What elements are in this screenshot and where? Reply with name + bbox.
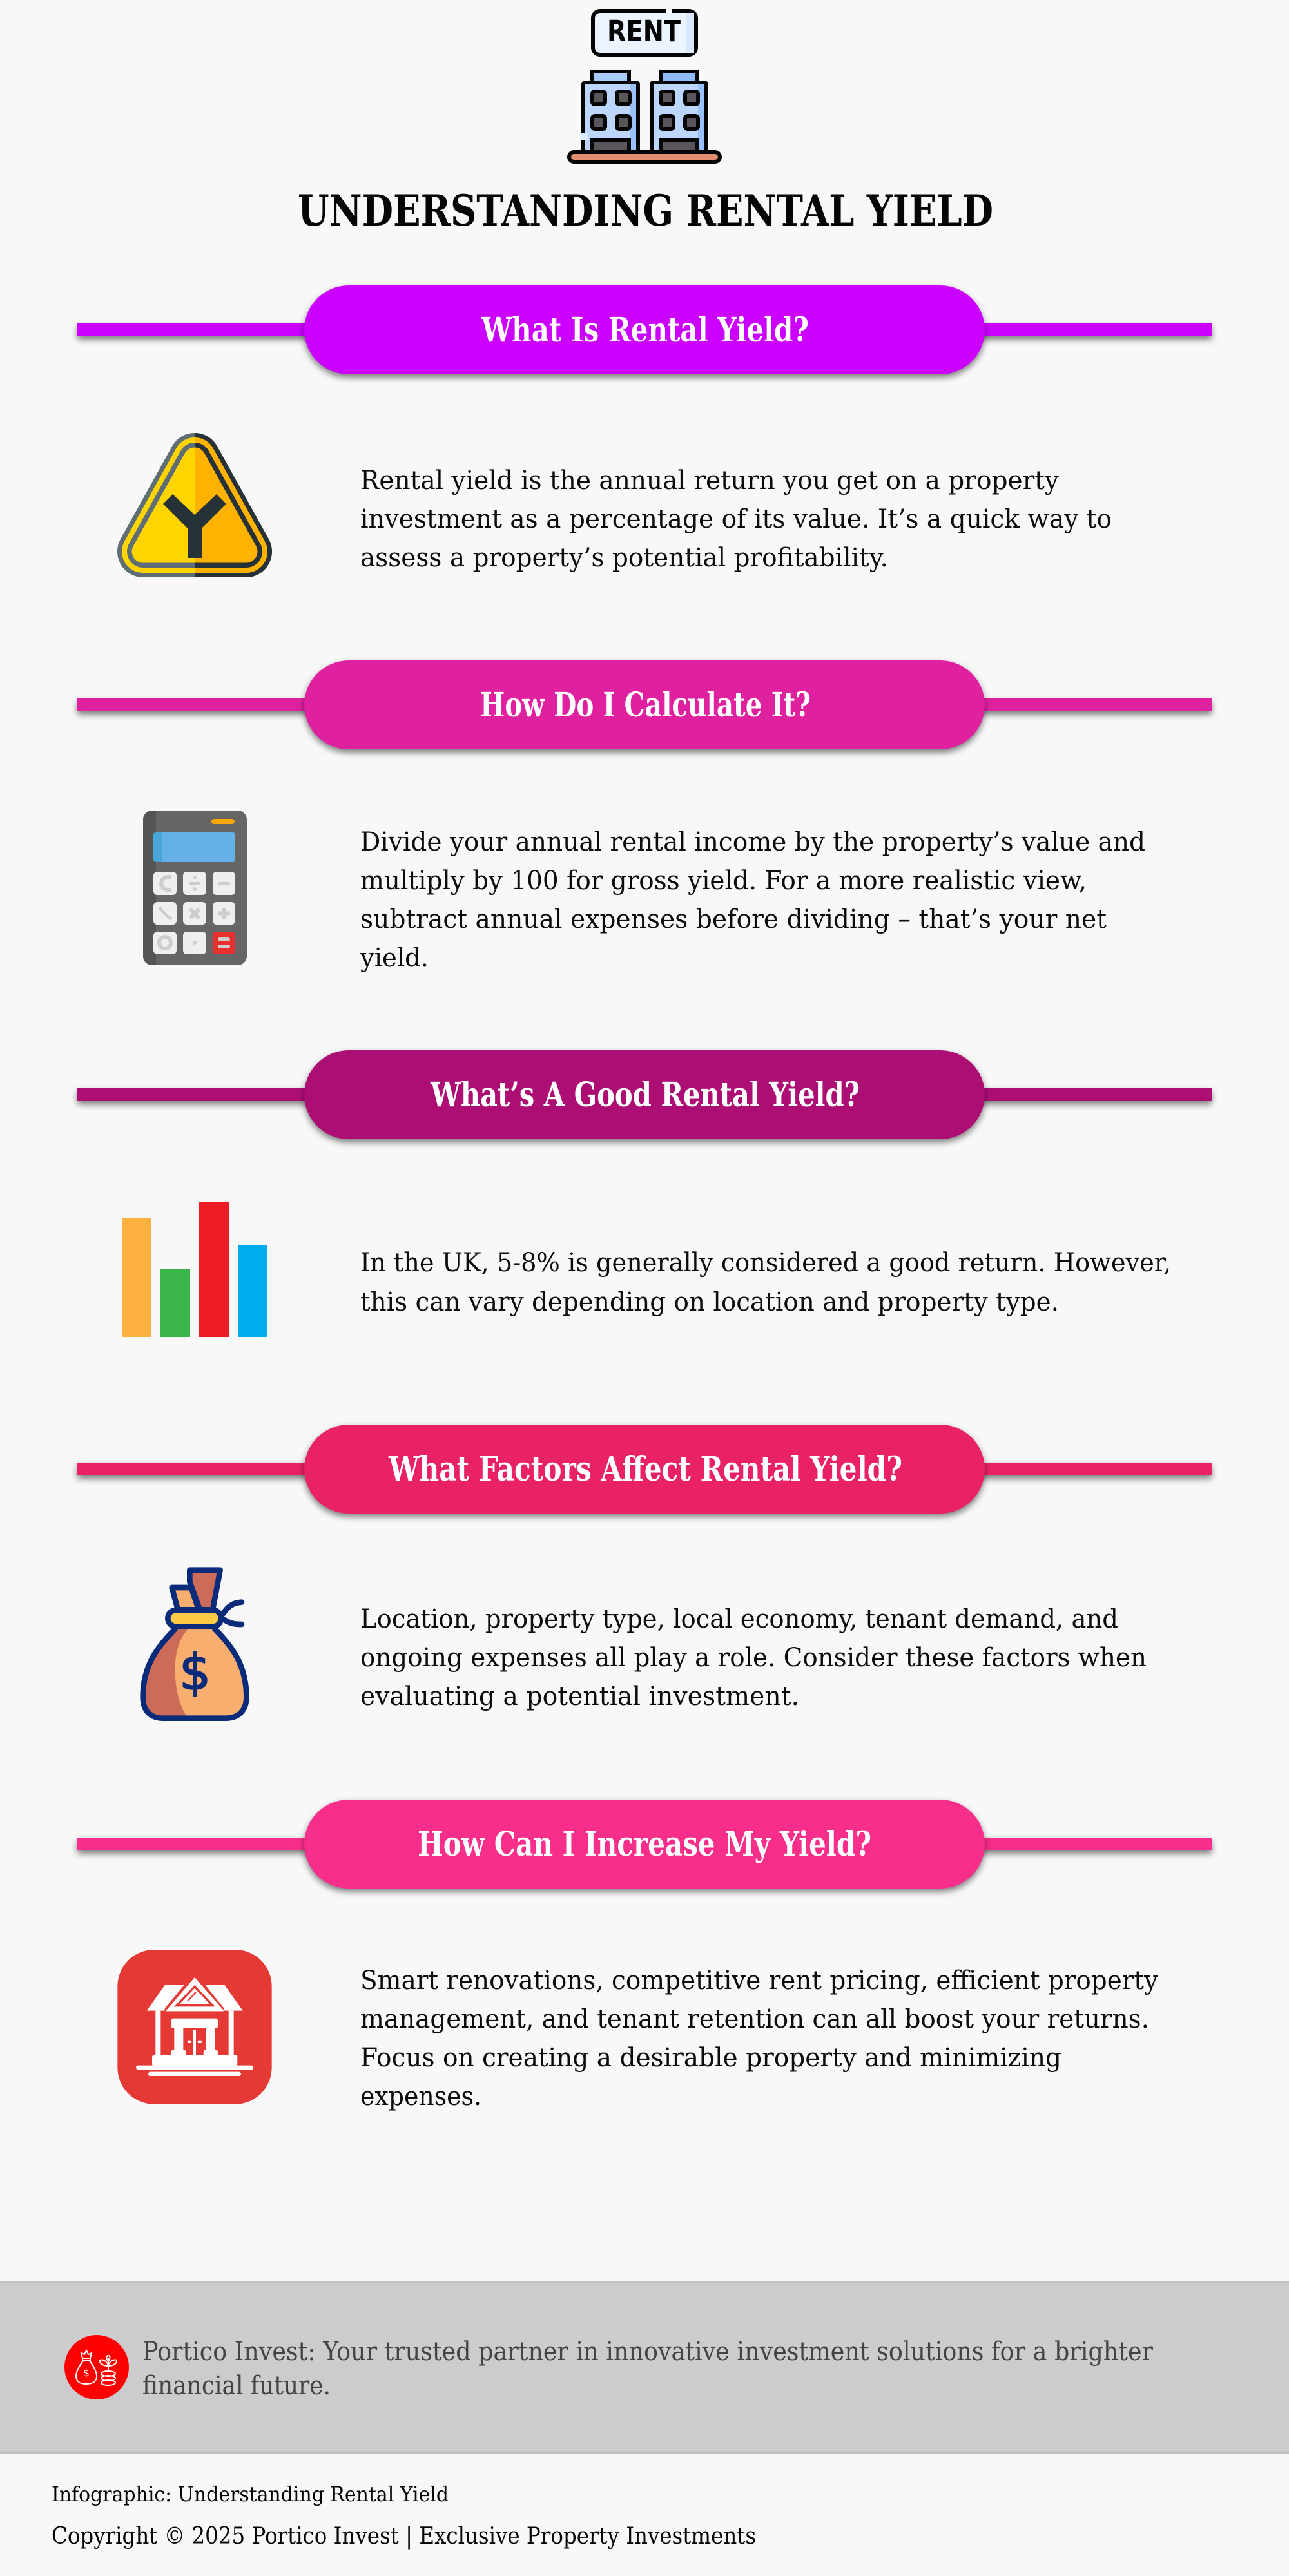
icon: yield road sign <box>143 459 246 558</box>
heading bar: How Can I Increase My Yield?: How Can I Increase My Yield? <box>418 1825 871 1864</box>
text: how can I increase my yield: expenses. <box>360 2082 481 2111</box>
text: what factors affect rental yield <box>360 1604 1147 1711</box>
icon: calculator <box>143 811 247 965</box>
text: what's a good rental yield: In the UK, 5-8% is generally considered a good return. However, <box>360 1248 1171 1278</box>
icon: money bag and plant logo: $ <box>83 2367 90 2379</box>
heading bar: What Factors Affect Rental Yield?: What Factors Affect Rental Yield? <box>388 1450 902 1489</box>
heading bar: What Is Rental Yield? <box>77 285 1212 374</box>
text: how do I calculate it: subtract annual expenses before dividing – that’s your net <box>360 905 1107 934</box>
icon: red property tile <box>117 1950 272 2104</box>
title: UNDERSTANDING RENTAL YIELD <box>298 186 993 236</box>
text: what is rental yield: Rental yield is the annual return you get on a property <box>360 466 1059 495</box>
text: what is rental yield: assess a property’s potential profitability. <box>360 543 888 573</box>
text: what factors affect rental yield: Location, property type, local economy, tenant demand, and <box>360 1604 1118 1634</box>
icon: bar chart <box>122 1202 267 1337</box>
section: what is rental yield <box>77 285 1212 573</box>
heading bar: What's A Good Rental Yield? <box>77 1050 1212 1139</box>
footer: copyright: Copyright © 2025 Portico Invest | Exclusive Property Investments <box>52 2523 756 2550</box>
section: what factors affect rental yield <box>77 1425 1212 1718</box>
section: how do I calculate it <box>77 660 1212 973</box>
text: what factors affect rental yield: ongoing expenses all play a role. Consider these factors when <box>360 1643 1147 1673</box>
icon: rent sign and buildings: RENT <box>607 14 681 48</box>
icon: money bag and plant logo <box>64 2335 129 2399</box>
text: company tagline <box>142 2337 1154 2401</box>
icon: money bag <box>143 1570 246 1718</box>
text: what's a good rental yield: this can vary depending on location and property type. <box>360 1287 1059 1317</box>
heading bar: What's A Good Rental Yield?: What’s A Good Rental Yield? <box>430 1075 860 1115</box>
text: how can I increase my yield: Smart renovations, competitive rent pricing, efficient property <box>360 1966 1158 1995</box>
text: how can I increase my yield: Focus on creating a desirable property and minimizing <box>360 2043 1061 2073</box>
heading bar: What Factors Affect Rental Yield? <box>77 1425 1212 1514</box>
heading bar: How Can I Increase My Yield? <box>77 1800 1212 1889</box>
text: how do I calculate it: Divide your annual rental income by the property’s value and <box>360 827 1145 857</box>
section: what's a good rental yield <box>77 1050 1212 1337</box>
text: how do I calculate it: multiply by 100 for gross yield. For a more realistic view, <box>360 866 1087 896</box>
text: company tagline: financial future. <box>142 2371 331 2401</box>
icon: rent sign and buildings <box>569 8 720 162</box>
icon: money bag: $ <box>179 1644 211 1702</box>
text: how can I increase my yield <box>360 1966 1158 2111</box>
text: how do I calculate it <box>360 827 1145 973</box>
text: what is rental yield: investment as a percentage of its value. It’s a quick way to <box>360 505 1112 534</box>
footer: infographic title: Infographic: Understanding Rental Yield <box>52 2482 449 2506</box>
section: how can I increase my yield <box>77 1800 1212 2111</box>
heading bar: How Do I Calculate It?: How Do I Calculate It? <box>480 686 811 725</box>
heading bar: How Do I Calculate It? <box>77 660 1212 749</box>
heading bar: What Is Rental Yield?: What Is Rental Yield? <box>481 311 809 350</box>
text: company tagline: Portico Invest: Your trusted partner in innovative investment solutions for a brighter <box>142 2337 1154 2367</box>
text: how can I increase my yield: management, and tenant retention can all boost your returns. <box>360 2004 1149 2034</box>
text: how do I calculate it: yield. <box>360 943 429 973</box>
panel: company strip <box>0 2281 1289 2454</box>
text: what factors affect rental yield: evaluating a potential investment. <box>360 1682 799 1711</box>
text: what's a good rental yield <box>360 1248 1171 1317</box>
text: what is rental yield <box>360 466 1112 573</box>
